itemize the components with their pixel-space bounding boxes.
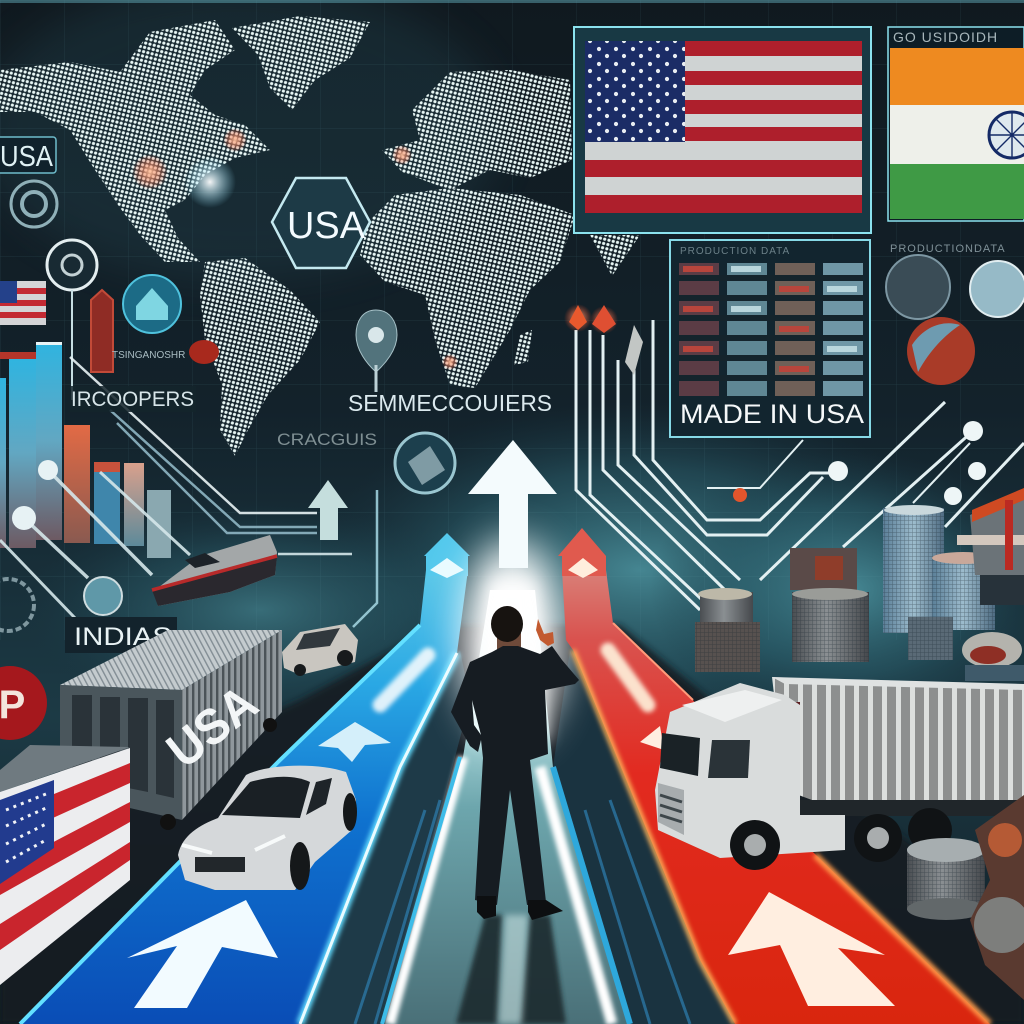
badge: USA hexagon (272, 178, 370, 268)
container label: USA (156, 674, 268, 779)
man raised hand (536, 619, 554, 646)
circuit nodes right (828, 421, 986, 505)
icon: red globe (907, 317, 975, 385)
truck trailer (772, 677, 1024, 816)
road: red lane (558, 528, 990, 1024)
label: Semiconductors: SEMMECCOUIERS (348, 390, 552, 416)
icon: blue lane arrow tip (424, 533, 470, 576)
map: South America (200, 258, 320, 456)
icon: house badge (123, 275, 181, 333)
circuit nodes left (12, 460, 58, 530)
icon: small up arrow (308, 480, 348, 540)
left stack of icons and labels (0, 137, 219, 400)
globes and icons right (886, 243, 1024, 385)
icon: red lane near arrow (728, 892, 895, 1006)
panel: Made in USA: MADE IN USA (680, 399, 864, 429)
icon: glowing arrow tips (564, 304, 643, 375)
icon: grey gear globe (886, 255, 950, 319)
label: Indicators: IRCOOPERS (71, 388, 194, 411)
map: North America (0, 20, 270, 262)
circuit lines right (576, 320, 1024, 612)
icon: red tower (91, 290, 113, 372)
label: Indias: INDIAS (74, 623, 172, 651)
icon: small US flag (0, 281, 46, 325)
map glow points (132, 128, 458, 370)
dotted world map (0, 16, 640, 456)
person in suit (451, 606, 579, 920)
drum (883, 505, 944, 633)
stacked red and white crates (957, 488, 1024, 605)
shipping container USA (60, 630, 282, 830)
truck cab (655, 683, 845, 858)
icon: blue lane far arrow (318, 722, 391, 762)
white car (178, 766, 357, 890)
drums cluster (695, 488, 1024, 681)
man jacket and legs (451, 646, 579, 905)
bar chart (0, 342, 171, 558)
drum foreground (907, 838, 985, 920)
drum (932, 552, 995, 630)
truck wheels (730, 808, 952, 870)
semi truck (655, 677, 1024, 870)
small label: TSINGANOSHR (112, 350, 185, 361)
small silver car far (282, 624, 358, 676)
label: USA: USA (0, 141, 54, 173)
drum (962, 632, 1024, 681)
container with US flag (0, 745, 130, 985)
icon: target (11, 181, 57, 227)
drum (695, 588, 760, 672)
drum (908, 617, 953, 660)
icon: blue lane near arrow (127, 900, 278, 1008)
icon: red oval (189, 340, 219, 364)
icon: blue globe (970, 261, 1024, 317)
centre lane bright strip (498, 915, 528, 1024)
panel: US flag (574, 27, 871, 233)
drum (790, 548, 857, 590)
small boat-like vehicle (152, 535, 277, 606)
small red lamp (733, 488, 747, 502)
icon: rupee badge (47, 240, 97, 400)
panel: Made in USA: PRODUCTION DATA (680, 246, 790, 257)
circuit lines left (0, 357, 377, 627)
map: Madagascar and Asia fragment (514, 235, 640, 365)
icon: round badge (395, 433, 455, 493)
badge: USA hexagon: USA (287, 205, 366, 247)
icon: edge gear (0, 579, 34, 631)
man shoes (477, 896, 563, 920)
shadow of man (456, 915, 566, 1024)
road bed (0, 625, 1024, 1024)
label: Cracks: CRACGUIS (277, 430, 377, 449)
arrow glows on lane tips (430, 558, 598, 578)
man neck and head (491, 606, 523, 650)
icon: red lane arrow tip (558, 528, 606, 576)
icon: red rupee badge (0, 666, 47, 740)
small heading: PRODUCTIONDATA (890, 243, 1006, 255)
panel: Made in USA (670, 240, 870, 437)
label: Indias (65, 617, 177, 653)
map: Greenland (232, 16, 370, 110)
icon: red lane far arrow (640, 726, 664, 750)
icon: small globe node (84, 577, 122, 615)
dark bands between lanes (300, 650, 735, 1024)
map: Africa (360, 188, 575, 388)
scrap pile right (970, 795, 1024, 1000)
road: blue lane (20, 533, 470, 1024)
flag heading: GO USIDOIDH (893, 29, 998, 45)
map: Europe (382, 70, 572, 190)
arrow: big central up arrow (468, 440, 557, 568)
icon: map pin (356, 310, 397, 392)
man left arm gap (472, 700, 481, 735)
panel: India flag (888, 27, 1024, 221)
drum (792, 588, 869, 662)
road: centre lane (382, 540, 630, 1024)
